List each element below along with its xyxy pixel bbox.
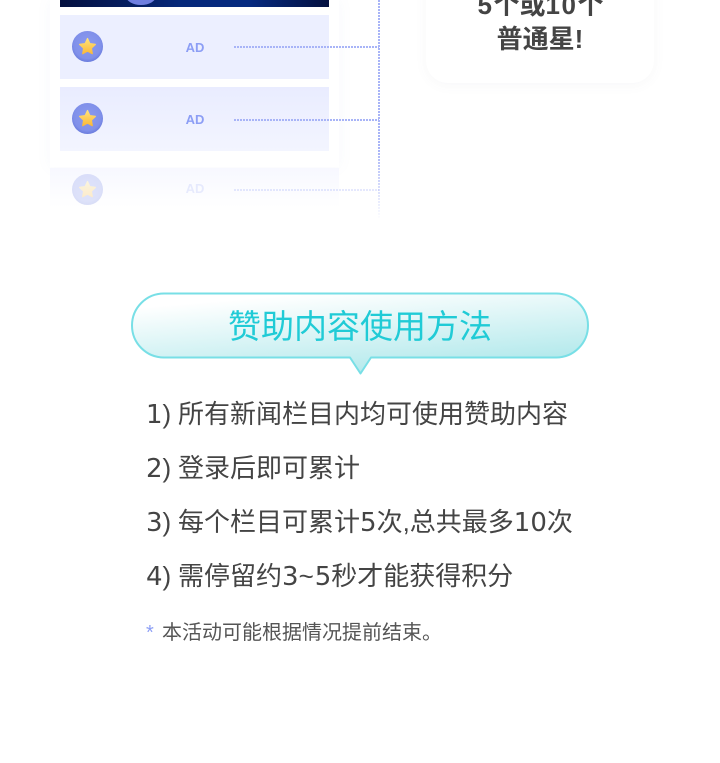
usage list: 4) bbox=[146, 561, 171, 592]
usage list: 2) bbox=[146, 453, 171, 484]
faded sponsored item 3 bbox=[50, 168, 339, 208]
usage list bbox=[146, 399, 573, 592]
callout card: 普通星! bbox=[497, 24, 583, 54]
usage list: 所有新闻栏目内均可使用赞助内容 bbox=[178, 399, 568, 429]
label: AD 3 faded: AD bbox=[186, 181, 204, 196]
callout card bbox=[426, 0, 654, 83]
sponsored item 2 bbox=[60, 87, 329, 151]
image strip at top of phone bbox=[60, 0, 329, 7]
footnote: 本活动可能根据情况提前结束。 bbox=[162, 622, 442, 644]
usage list: 每个栏目可累计5次,总共最多10次 bbox=[178, 507, 573, 538]
label: AD 1: AD bbox=[186, 40, 204, 55]
usage list: 登录后即可累计 bbox=[178, 453, 360, 483]
usage list: 1) bbox=[146, 399, 171, 430]
icon: star coin 1 bbox=[72, 31, 103, 62]
heading: speech bubble bbox=[131, 292, 589, 374]
usage list: 需停留约3~5秒才能获得积分 bbox=[178, 561, 513, 592]
icon: faded star coin 3 bbox=[72, 174, 103, 205]
heading: speech bubble: 赞助内容使用方法 bbox=[228, 308, 492, 345]
panel: phone screen bbox=[50, 0, 339, 167]
footnote: * bbox=[146, 622, 154, 644]
label: AD 2: AD bbox=[186, 112, 204, 127]
usage list: 3) bbox=[146, 507, 171, 538]
dotted connectors bbox=[234, 0, 380, 214]
sponsored item 1 bbox=[60, 15, 329, 79]
icon: star coin 2 bbox=[72, 103, 103, 134]
